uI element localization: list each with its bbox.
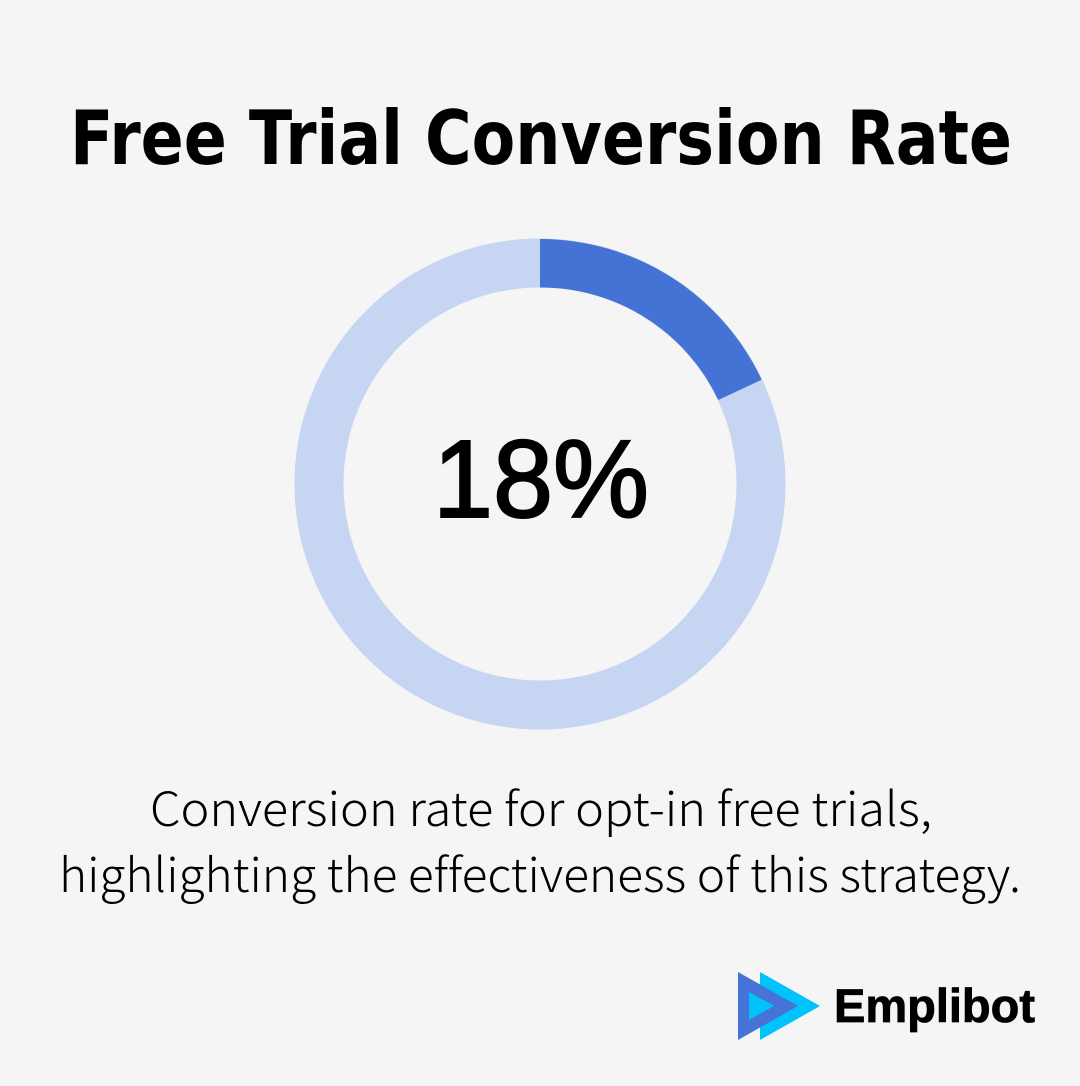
- description text: [59, 771, 1021, 906]
- donut chart: [319, 239, 762, 705]
- donut track: [319, 263, 761, 705]
- icon: play arrows: [738, 972, 820, 1040]
- description text: highlighting the effectiveness of this strategy.: [59, 837, 1021, 906]
- description text: Conversion rate for opt-in free trials,: [150, 771, 932, 840]
- donut segment: 18%: [540, 239, 762, 400]
- logo: Emplibot: [738, 972, 1035, 1040]
- center value: 18%: [433, 418, 649, 541]
- logo wordmark: Emplibot: [834, 979, 1035, 1032]
